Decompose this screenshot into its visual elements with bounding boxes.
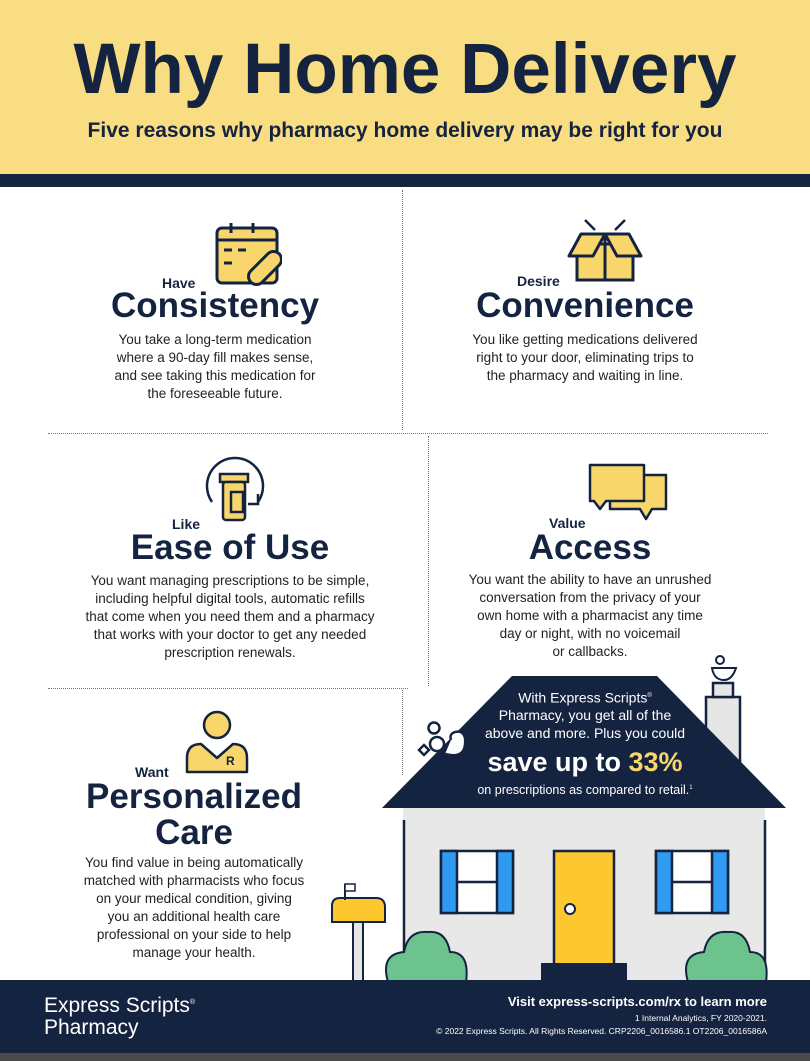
callout: savings in roof: save up to 33% [487,747,683,777]
callout: savings in roof: With Express Scripts® [518,690,652,706]
panel: ease of use [86,456,374,660]
label: desire: Desire [517,273,560,289]
text [86,573,374,660]
label: have: Have [162,275,195,291]
mailbox [332,884,385,982]
text: prescription renewals. [164,645,296,660]
label: want: Want [135,764,169,780]
logo: Pharmacy [44,1016,139,1039]
text [114,332,316,401]
windows [441,851,728,913]
heading: consistency: Consistency [111,286,319,325]
text: right to your door, eliminating trips to [476,350,694,365]
house illustration [331,655,786,980]
footer [0,980,810,1053]
heading: access: Access [529,528,651,567]
text [469,572,711,659]
callout: savings in roof: on prescriptions as compared to retail.1 [477,783,693,797]
panel: convenience [472,219,698,383]
panel: consistency [111,223,319,401]
walls [403,806,765,982]
label: like: Like [172,516,200,532]
text: manage your health. [132,945,256,960]
text: the foreseeable future. [147,386,283,401]
subtitle: Five reasons why pharmacy home delivery may be right for you [88,119,722,142]
text: You want managing prescriptions to be simple, [91,573,369,588]
icon: calendar with pill [216,223,282,286]
heading: personalized care: Care [155,813,233,852]
bushes [386,932,767,982]
text: professional on your side to help [97,927,291,942]
squirrel icon [419,722,465,755]
door [541,851,627,982]
text: that come when you need them and a pharmacy [86,609,374,624]
heading: personalized care [86,777,302,852]
logo: Express Scripts® [44,994,195,1017]
text: or callbacks. [552,644,628,659]
text: You find value in being automatically [85,855,303,870]
icon: open box [568,219,642,282]
title: Why Home Delivery [74,30,736,109]
text: on your medical condition, giving [96,891,292,906]
text: matched with pharmacists who focus [84,873,304,888]
text: You want the ability to have an unrushed [469,572,711,587]
text: You like getting medications delivered [472,332,698,347]
text: the pharmacy and waiting in line. [487,368,683,383]
text: where a 90-day fill makes sense, [117,350,313,365]
icon: chat bubbles [588,464,668,520]
footer text: 1 Internal Analytics, FY 2020-2021. [635,1013,767,1023]
text [84,855,304,960]
header band [0,0,810,174]
footer text: © 2022 Express Scripts. All Rights Reserved. CRP2206_0016586.1 OT2206_0016586A [436,1026,767,1036]
text: conversation from the privacy of your [479,590,701,605]
footer text [436,994,767,1036]
callout: savings in roof: above and more. Plus you could [485,725,685,741]
text: you an additional health care [108,909,280,924]
text [472,332,698,383]
footer text: Visit express-scripts.com/rx to learn more [508,994,767,1009]
chimney [706,656,740,777]
text: own home with a pharmacist any time [477,608,703,623]
panel: personalized care [84,710,304,960]
text: that works with your doctor to get any needed [94,627,366,642]
label: value: Value [549,515,586,531]
roof [382,676,786,808]
heading: convenience: Convenience [476,286,694,325]
heading: personalized care: Personalized [86,777,302,816]
icon: pharmacist: R [226,754,235,768]
text: You take a long-term medication [118,332,312,347]
icon: pill bottle refill [206,456,264,522]
logo [44,994,195,1039]
text: day or night, with no voicemail [500,626,680,641]
callout: savings in roof: Pharmacy, you get all of the [499,707,671,723]
heading: ease of use: Ease of Use [131,528,329,567]
icon: pharmacist [186,710,248,774]
panel: access [469,464,711,659]
text: and see taking this medication for [114,368,316,383]
callout: savings in roof [477,690,693,797]
text: including helpful digital tools, automatic refills [95,591,365,606]
